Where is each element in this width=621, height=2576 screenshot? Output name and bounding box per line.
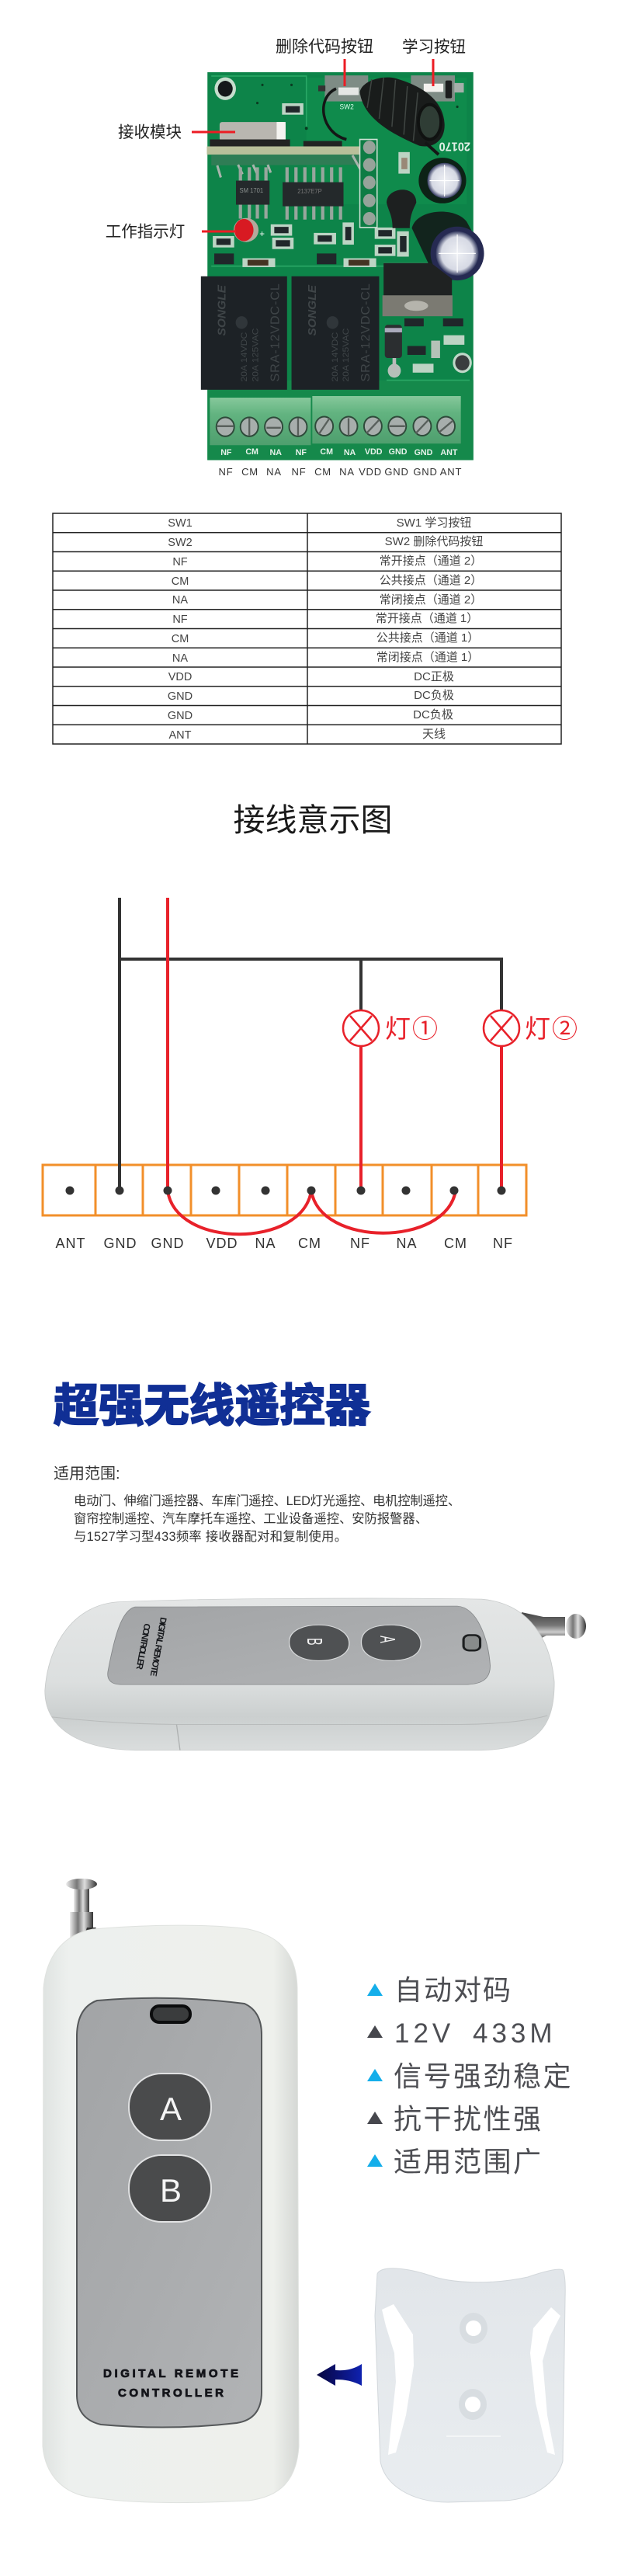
chips: SM 1701 [240, 187, 264, 194]
pcb base [207, 72, 474, 460]
lamp 2 [484, 1010, 519, 1046]
shell [43, 1925, 299, 2503]
left column: CM [172, 575, 189, 588]
board date text: 20170 [439, 139, 470, 153]
label: learn button: 学习按钮 [402, 38, 466, 56]
button B [290, 1625, 349, 1660]
left column: NF [172, 556, 188, 568]
antenna [66, 1879, 97, 1949]
heading: super strong wireless remote: 超强无线遥控器 [54, 1381, 370, 1431]
pointer line [192, 130, 235, 134]
terminal labels under board [219, 466, 462, 478]
board silkscreen labels: NF [220, 448, 232, 457]
board silkscreen labels: CM [245, 447, 258, 457]
led indicator [234, 218, 265, 242]
terminal labels: ANT [56, 1236, 85, 1251]
relay 1 [201, 276, 287, 390]
item 3: 信号强劲稳定 [394, 2060, 573, 2092]
terminal labels [56, 1236, 513, 1251]
terminal labels under board: VDD [359, 466, 382, 478]
right column: DC正极 [414, 670, 454, 683]
terminal labels under board: GND [384, 466, 409, 478]
right column: SW2 删除代码按钮 [385, 535, 483, 548]
right column: 常开接点（通道 1） [376, 612, 478, 625]
pointer line [202, 230, 236, 233]
label: work indicator: 工作指示灯 [106, 223, 185, 241]
photo: wall clip [375, 2268, 565, 2502]
led window [463, 1636, 480, 1650]
terminal labels under board: NA [266, 466, 282, 478]
right column: 常开接点（通道 2） [380, 554, 482, 568]
table: terminal definitions [53, 513, 561, 744]
label: delete code button: 删除代码按钮 [276, 38, 373, 56]
left column: CM [172, 633, 189, 645]
text block: application scope: 窗帘控制遥控、汽车摩托车遥控、工业设备遥控、安防报警器、 [74, 1512, 428, 1526]
terminal labels under board: NA [339, 466, 355, 478]
button A [361, 1625, 421, 1660]
button A: A [160, 2091, 182, 2127]
label: receiver module: 接收模块 [118, 123, 182, 141]
terminal labels under board: CM [241, 466, 258, 478]
item 2: 12V [394, 2018, 454, 2049]
left column: NF [172, 614, 188, 626]
left window [382, 2304, 414, 2455]
relay 2: SONGLE [306, 284, 319, 335]
terminal labels under board: NF [292, 466, 306, 478]
board silkscreen labels: GND [389, 447, 407, 457]
label: learn button [402, 38, 466, 86]
relay 1: SONGLE [216, 284, 228, 335]
printed model text [103, 2367, 238, 2400]
board silkscreen labels: VDD [365, 447, 382, 457]
button A: A [376, 1636, 400, 1643]
relay 1: 20A 125VAC [250, 328, 261, 382]
text block: application scope [54, 1465, 460, 1544]
right column [376, 516, 483, 741]
terminal labels: NF [493, 1236, 513, 1251]
terminal labels: CM [298, 1236, 321, 1251]
terminal labels: VDD [206, 1236, 238, 1251]
terminal labels: NA [255, 1236, 276, 1251]
item 5: 适用范围广 [394, 2146, 543, 2178]
photo: remote horizontal [45, 1598, 586, 1750]
terminal block outline [43, 1165, 526, 1215]
printed model text: DIGITAL REMOTE [103, 2367, 238, 2380]
right column: 常闭接点（通道 1） [376, 651, 479, 664]
resistors and small parts [213, 103, 464, 373]
left column: NA [172, 652, 188, 665]
button sw2: SW2 [340, 103, 354, 110]
terminal labels under board: GND [413, 466, 438, 478]
black wires [120, 898, 501, 1191]
left column: VDD [168, 671, 192, 683]
diode [385, 325, 402, 377]
board silkscreen labels: NA [344, 448, 356, 457]
item 1: 自动对码 [394, 1974, 512, 2006]
left column: GND [168, 690, 193, 703]
label: work indicator [106, 223, 236, 241]
antenna [522, 1612, 586, 1639]
board silkscreen labels: ANT [440, 448, 458, 457]
receiver module [206, 141, 363, 177]
button B: B [303, 1638, 327, 1646]
led window [151, 2006, 190, 2022]
relay 2: 20A 14VDC [329, 332, 340, 382]
left column: SW2 [168, 537, 193, 549]
chips: 2137E7P [297, 188, 322, 195]
pointer line [343, 59, 346, 86]
pointer line [432, 59, 435, 86]
relay 1: SRA-12VDC-CL [269, 283, 282, 382]
board silkscreen labels: NF [296, 448, 307, 457]
printed model text: DIGITAL REMOTE [148, 1616, 168, 1677]
terminal labels: GND [104, 1236, 137, 1251]
text block: application scope: 电动门、伸缩门遥控器、车库门遥控、LED灯光遥控、电机控制遥控、 [74, 1494, 460, 1508]
right window [530, 2307, 560, 2455]
item 2 [367, 2018, 557, 2049]
terminal labels under board: CM [314, 466, 331, 478]
item 2: 433M [473, 2018, 557, 2049]
board silkscreen labels: NA [270, 448, 282, 457]
led indicator: + [259, 228, 265, 239]
label: receiver module [118, 123, 235, 141]
mounting hole bottom [459, 2389, 487, 2420]
text block: application scope: 与1527学习型433频率 接收器配对和复制使用。 [74, 1530, 347, 1544]
left column: NA [172, 594, 188, 607]
right column: SW1 学习按钮 [397, 516, 471, 530]
arrow pointing to remote [317, 2364, 362, 2386]
left column: ANT [169, 729, 192, 742]
transistor q7 [387, 189, 416, 228]
heading: wiring diagram: 接线意示图 [233, 802, 393, 838]
left column: GND [168, 710, 193, 722]
right column: 公共接点（通道 1） [376, 631, 479, 645]
right column: DC负极 [413, 708, 453, 721]
label: delete code button [276, 38, 373, 86]
right column: DC负极 [414, 689, 454, 702]
terminal labels: CM [444, 1236, 467, 1251]
crystal can [210, 122, 290, 146]
shell [45, 1598, 554, 1750]
lamp 2 label: 灯② [525, 1014, 579, 1043]
chips [236, 167, 344, 220]
relay 2: 20A 125VAC [340, 328, 351, 382]
capacitor c2 [418, 158, 467, 203]
board silkscreen labels: CM [320, 447, 333, 457]
terminal labels under board: ANT [440, 466, 462, 478]
terminal labels: NA [396, 1236, 418, 1251]
right column: 公共接点（通道 2） [380, 574, 482, 587]
button B [129, 2155, 211, 2222]
button sw1 [411, 75, 464, 102]
mounting hole top [460, 2313, 487, 2344]
button sw2 [318, 75, 368, 110]
header pins [360, 140, 377, 228]
text block: application scope: 适用范围: [54, 1465, 120, 1483]
lamp 1 [343, 1010, 379, 1046]
terminal labels: NF [350, 1236, 370, 1251]
item 4: 抗干扰性强 [394, 2103, 543, 2135]
red wires [168, 898, 501, 1191]
regulator [383, 263, 453, 316]
relay 2 [292, 276, 379, 390]
terminal block [210, 396, 461, 445]
lamp 1 label: 灯① [385, 1014, 439, 1043]
capacitor c1 [412, 212, 484, 280]
right column: 天线 [422, 728, 446, 741]
printed model text: CONTROLLER [118, 2387, 224, 2400]
antenna coil [324, 78, 445, 155]
left column: SW1 [168, 517, 193, 530]
right column: 常闭接点（通道 2） [380, 593, 482, 607]
relay 2: SRA-12VDC-CL [359, 283, 373, 382]
button B: B [160, 2172, 182, 2209]
terminal labels under board: NF [219, 466, 233, 478]
panel: circuit board photo [201, 72, 484, 460]
feature list [367, 1974, 573, 2178]
jumper arcs [168, 1191, 456, 1234]
board silkscreen labels: GND [415, 448, 432, 457]
gray panel [77, 1998, 262, 2428]
printed model text: CONTROLLER [134, 1622, 151, 1670]
left column [168, 517, 193, 742]
photo: remote vertical [43, 1879, 299, 2503]
board silkscreen labels [220, 447, 458, 457]
wiring diagram [43, 898, 579, 1251]
button A [129, 2074, 211, 2140]
printed model text [134, 1616, 168, 1677]
terminal dots [65, 1187, 506, 1194]
terminal labels: GND [151, 1236, 185, 1251]
relay 1: 20A 14VDC [238, 332, 249, 382]
gray panel [108, 1606, 490, 1684]
